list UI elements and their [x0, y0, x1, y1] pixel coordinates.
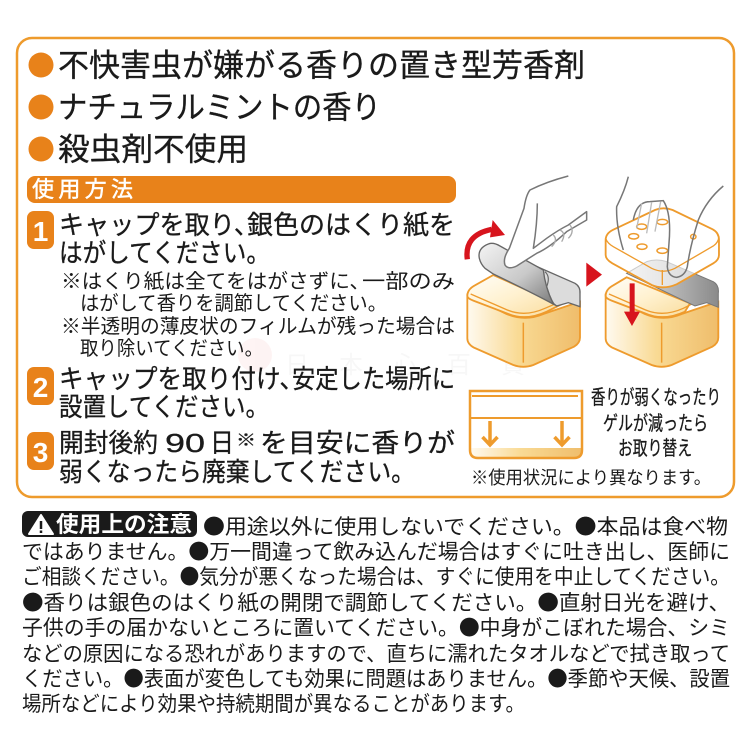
precautions text: ご相談ください。●気分が悪くなった場合は、すぐに使用を中止してください。	[22, 561, 730, 591]
down arrows	[482, 421, 570, 445]
hand holding cap	[617, 177, 723, 277]
step 3	[27, 428, 455, 487]
precautions text: ●用途以外に使用しないでください。 ●本品は食べ物	[203, 511, 728, 541]
watermark: 日本心百貨	[285, 352, 525, 379]
panel: product usage	[17, 38, 734, 497]
red down arrow	[624, 283, 640, 326]
precautions text: ではありません。●万一間違って飲み込んだ場合はすぐに吐き出し、医師に	[22, 536, 730, 566]
step 2	[27, 364, 455, 422]
replacement caption: ゲルが減ったら	[603, 412, 708, 435]
container lid	[606, 277, 690, 317]
illustration: replacing cap	[606, 177, 723, 367]
step 2 instruction: キャップを取り付け、	[59, 364, 304, 394]
floating cap	[606, 208, 719, 287]
cap holes	[629, 219, 696, 253]
precautions text: ●香りは銀色のはくり紙の開閉で調節してください。 ●直射日光を避け、	[22, 587, 730, 617]
step 3 instruction	[59, 428, 455, 487]
step 2 instruction: 安定した場所に	[292, 364, 455, 394]
red triangle arrow	[586, 263, 602, 287]
feature list	[28, 47, 585, 167]
step 3 instruction: 弱くなったら廃棄してください。	[59, 457, 415, 487]
step 3 instruction: ※	[236, 431, 256, 450]
container outline	[470, 391, 582, 458]
step 3 instruction: 90	[165, 428, 205, 458]
icon: warning	[29, 515, 53, 534]
hand peeling	[504, 176, 587, 268]
step 1 notes: 一部のみ	[362, 270, 455, 293]
step 1 instruction: 銀色のはくり紙を	[247, 210, 455, 240]
container body	[467, 295, 580, 367]
feature: no insecticide: 殺虫剤不使用	[58, 131, 248, 167]
step 2 instruction	[59, 364, 455, 422]
feature: natural mint: ナチュラルミントの香り	[58, 89, 381, 125]
step 1 notes	[61, 270, 455, 360]
red curved arrow	[467, 229, 492, 259]
gel fill	[470, 448, 583, 458]
foil rim	[533, 265, 580, 307]
container body	[606, 295, 718, 367]
precautions text: ください。●表面が変色しても効果に問題はありません。●季節や天候、設置	[22, 663, 730, 693]
badge 3	[27, 432, 54, 470]
badge 1: 1	[33, 216, 48, 247]
badge 3: 3	[33, 437, 48, 468]
heading: how to use	[27, 176, 456, 203]
step 1	[27, 210, 455, 360]
step 1 instruction: キャップを取り、	[59, 210, 259, 240]
illustration: peeling foil	[467, 176, 602, 367]
feature: insect-repelling scent: 不快害虫が嫌がる香りの置き型芳香剤	[58, 47, 585, 83]
step 1 notes: ※はくり紙は全てをはがさずに、	[61, 270, 370, 293]
peeled foil	[479, 243, 555, 305]
heading: how to use: 使用方法	[32, 177, 133, 202]
foil on container	[627, 260, 718, 307]
illustration: gel level diagram	[470, 391, 583, 458]
step 3 instruction: 開封後約	[59, 428, 158, 458]
precautions text	[22, 511, 730, 716]
precautions text: などの原因になる恐れがありますので、直ちに濡れたタオルなどで拭き取って	[22, 643, 730, 666]
replacement caption	[591, 386, 721, 460]
container lid	[467, 275, 560, 317]
precautions text: 場所などにより効果や持続期間が異なることがあります。	[22, 693, 525, 716]
badge 1	[27, 211, 54, 249]
watermark	[238, 338, 525, 379]
step 1 instruction	[59, 210, 455, 268]
badge 2: 2	[33, 372, 48, 403]
step 3 instruction: を目安に香りが	[260, 428, 455, 458]
step 1 notes: 取り除いてください。	[80, 337, 263, 360]
step 2 instruction: 設置してください。	[59, 392, 269, 422]
step 3 instruction: 日	[210, 428, 234, 458]
precautions badge: 使用上の注意	[56, 512, 192, 537]
usage footnote: ※使用状況により異なります。	[471, 468, 711, 488]
step 1 instruction: はがしてください。	[59, 238, 270, 268]
badge 2	[27, 367, 54, 405]
step 1 notes: ※半透明の薄皮状のフィルムが残った場合は	[61, 315, 455, 338]
replacement caption: お取り替え	[618, 437, 692, 460]
panel: precautions	[22, 511, 730, 716]
step 1 notes: はがして香りを調節してください。	[80, 292, 387, 315]
precautions text: 子供の手の届かないところに置いてください。●中身がこぼれた場合、シミ	[22, 612, 730, 642]
